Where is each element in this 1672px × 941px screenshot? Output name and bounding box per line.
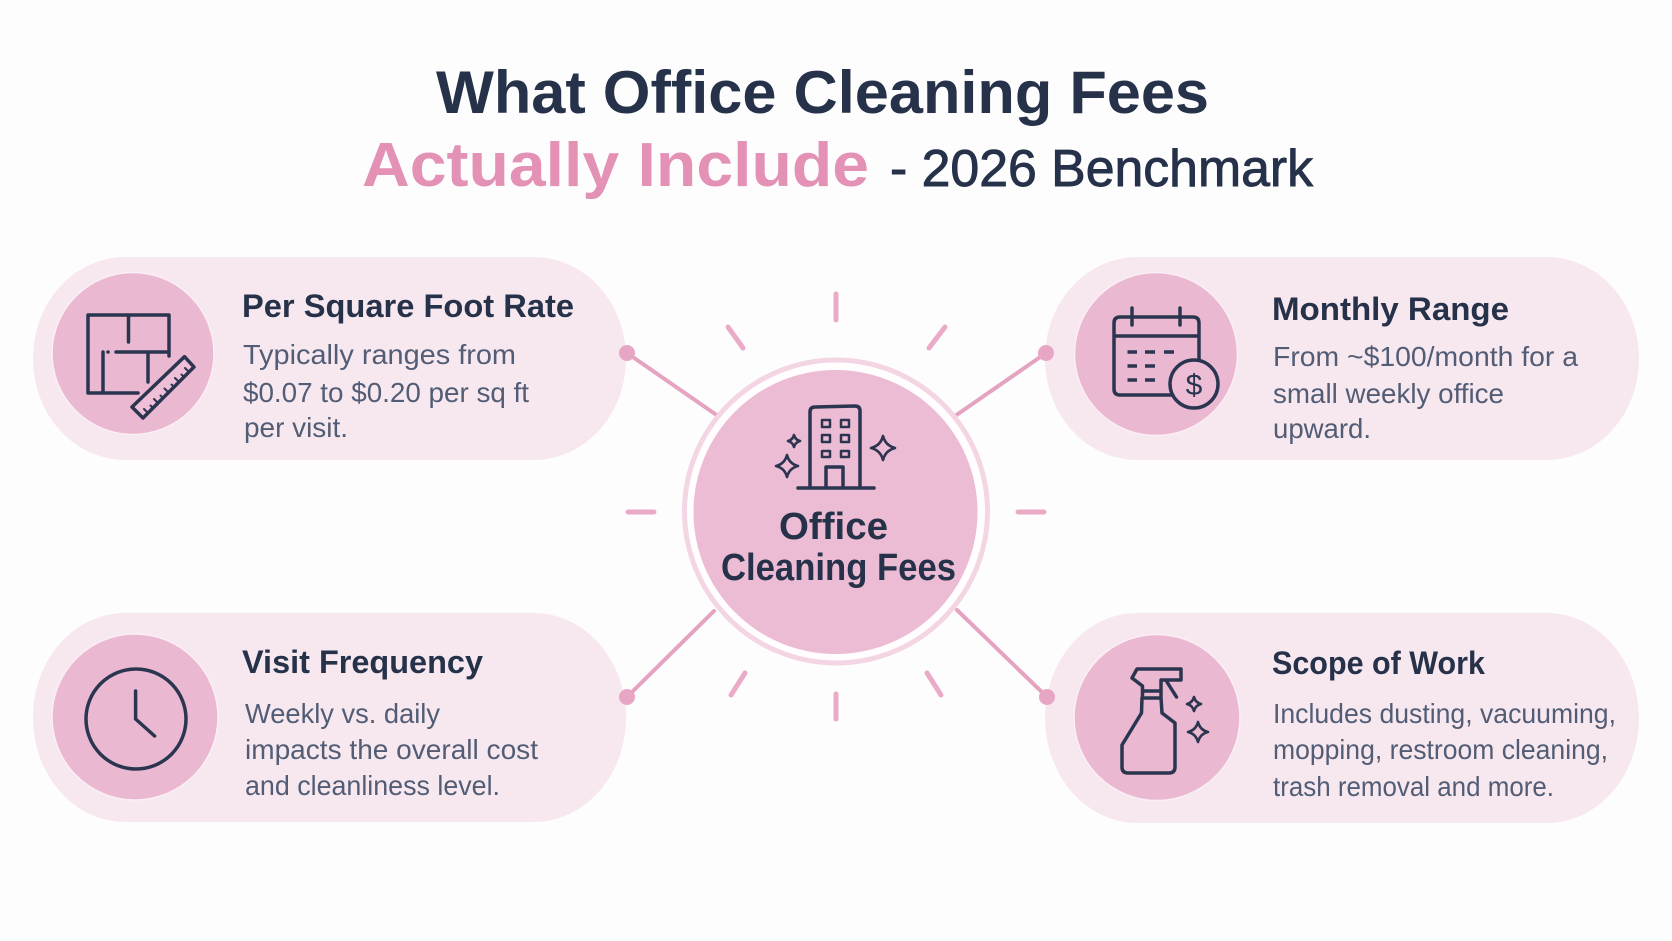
connector: top right [955,345,1054,416]
description: trash removal and more. [1273,771,1554,802]
hub label: Office [779,506,888,548]
hub label: Cleaning Fees [721,547,956,589]
description: $0.07 to $0.20 per sq ft [243,377,529,408]
panel: monthly range [1045,257,1639,460]
description: Typically ranges from [243,339,516,370]
title [362,59,1314,200]
connector: bottom right [957,610,1055,705]
sunburst rays around hub [628,294,1044,719]
heading: Per Square Foot Rate [242,288,574,324]
heading: Visit Frequency [242,644,483,680]
description [243,339,529,443]
hub label [721,506,956,589]
central hub: office cleaning fees [684,360,988,663]
icon badge: spray bottle [1074,634,1240,800]
description: impacts the overall cost [245,734,538,765]
icon badge: clock [52,634,218,800]
description: mopping, restroom cleaning, [1273,734,1608,765]
description: From ~$100/month for a [1273,341,1578,372]
icon badge: calendar with dollar coin [1074,272,1238,436]
panel: visit frequency [33,613,626,822]
panel: scope of work [1045,613,1639,823]
description: small weekly office [1273,378,1504,409]
icon badge: floor plan and ruler [52,272,214,434]
description: Includes dusting, vacuuming, [1273,698,1616,729]
description: upward. [1273,413,1371,444]
icon badge: calendar with dollar coin: $ [1186,369,1203,402]
description [245,698,538,801]
title: Actually Include [362,131,869,200]
description: Weekly vs. daily [245,698,440,729]
title: What Office Cleaning Fees [436,59,1209,126]
description [1273,698,1616,802]
connector: top left [619,345,718,416]
panel: per square foot rate [33,257,626,460]
description [1273,341,1578,444]
heading: Scope of Work [1272,645,1485,681]
title: - 2026 Benchmark [890,140,1314,198]
connector: bottom left [619,611,714,705]
icon: office building with sparkles [776,406,895,488]
heading: Monthly Range [1272,291,1509,327]
description: and cleanliness level. [245,770,500,801]
description: per visit. [244,412,348,443]
